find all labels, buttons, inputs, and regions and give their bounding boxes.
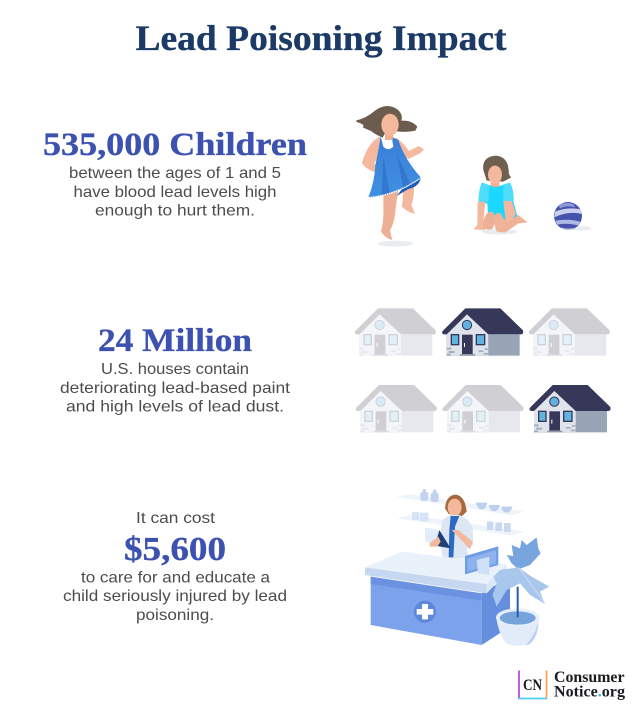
text block: children description: enough to hurt them. bbox=[95, 202, 255, 220]
heading: $5,600: $5,600 bbox=[124, 531, 226, 568]
text block: cost intro: It can cost bbox=[136, 510, 216, 527]
icon: ball bbox=[554, 202, 591, 231]
text block: children description: between the ages of 1 and 5 bbox=[69, 165, 281, 182]
icon: house dark bbox=[442, 308, 523, 356]
panel: cost statistic bbox=[63, 510, 287, 624]
text block: houses description: and high levels of lead dust. bbox=[66, 398, 284, 416]
icon: house grey bbox=[356, 385, 437, 432]
text block: cost description: to care for and educate a bbox=[81, 570, 270, 586]
panel: houses statistic bbox=[60, 323, 291, 416]
icon: house grey bbox=[355, 308, 436, 356]
wordmark: Notice.org bbox=[554, 684, 625, 700]
icon: computer monitor bbox=[465, 546, 498, 575]
icon: running girl bbox=[356, 106, 424, 247]
counter bbox=[365, 552, 510, 645]
text block: houses description: U.S. houses contain bbox=[101, 361, 249, 378]
icon: house grey bbox=[529, 308, 610, 356]
text block: children description: have blood lead levels high bbox=[74, 184, 276, 201]
logo: ConsumerNotice.org bbox=[518, 669, 625, 700]
shelves with bottles, boxes, bowls and jars bbox=[396, 489, 525, 536]
heading: 24 Million: 24 Million bbox=[98, 323, 252, 359]
icon: house dark bbox=[529, 385, 611, 432]
figure: pharmacist bbox=[425, 495, 473, 558]
illustration: children playing bbox=[356, 106, 591, 247]
text block: cost description bbox=[63, 570, 287, 624]
text block: houses description: deteriorating lead-based paint bbox=[60, 380, 291, 397]
illustration: pharmacy counter bbox=[365, 489, 549, 646]
text block: cost description: child seriously injured by lead bbox=[63, 588, 287, 605]
text block: cost description: poisoning. bbox=[136, 607, 214, 624]
wordmark: Consumer bbox=[554, 669, 625, 686]
text block: houses description bbox=[60, 361, 291, 416]
wordmark bbox=[554, 669, 625, 700]
icon: CN gradient square: CN bbox=[523, 677, 542, 694]
illustration: six houses bbox=[355, 308, 611, 432]
icon: sitting child bbox=[473, 156, 528, 235]
text block: children description bbox=[69, 165, 281, 220]
icon: potted plant bbox=[493, 537, 549, 646]
icon: house grey bbox=[442, 385, 524, 432]
panel: children statistic bbox=[43, 127, 307, 220]
title: Lead Poisoning Impact bbox=[136, 18, 507, 58]
icon: medical cross bbox=[414, 601, 436, 623]
heading: 535,000 Children: 535,000 Children bbox=[43, 127, 307, 163]
